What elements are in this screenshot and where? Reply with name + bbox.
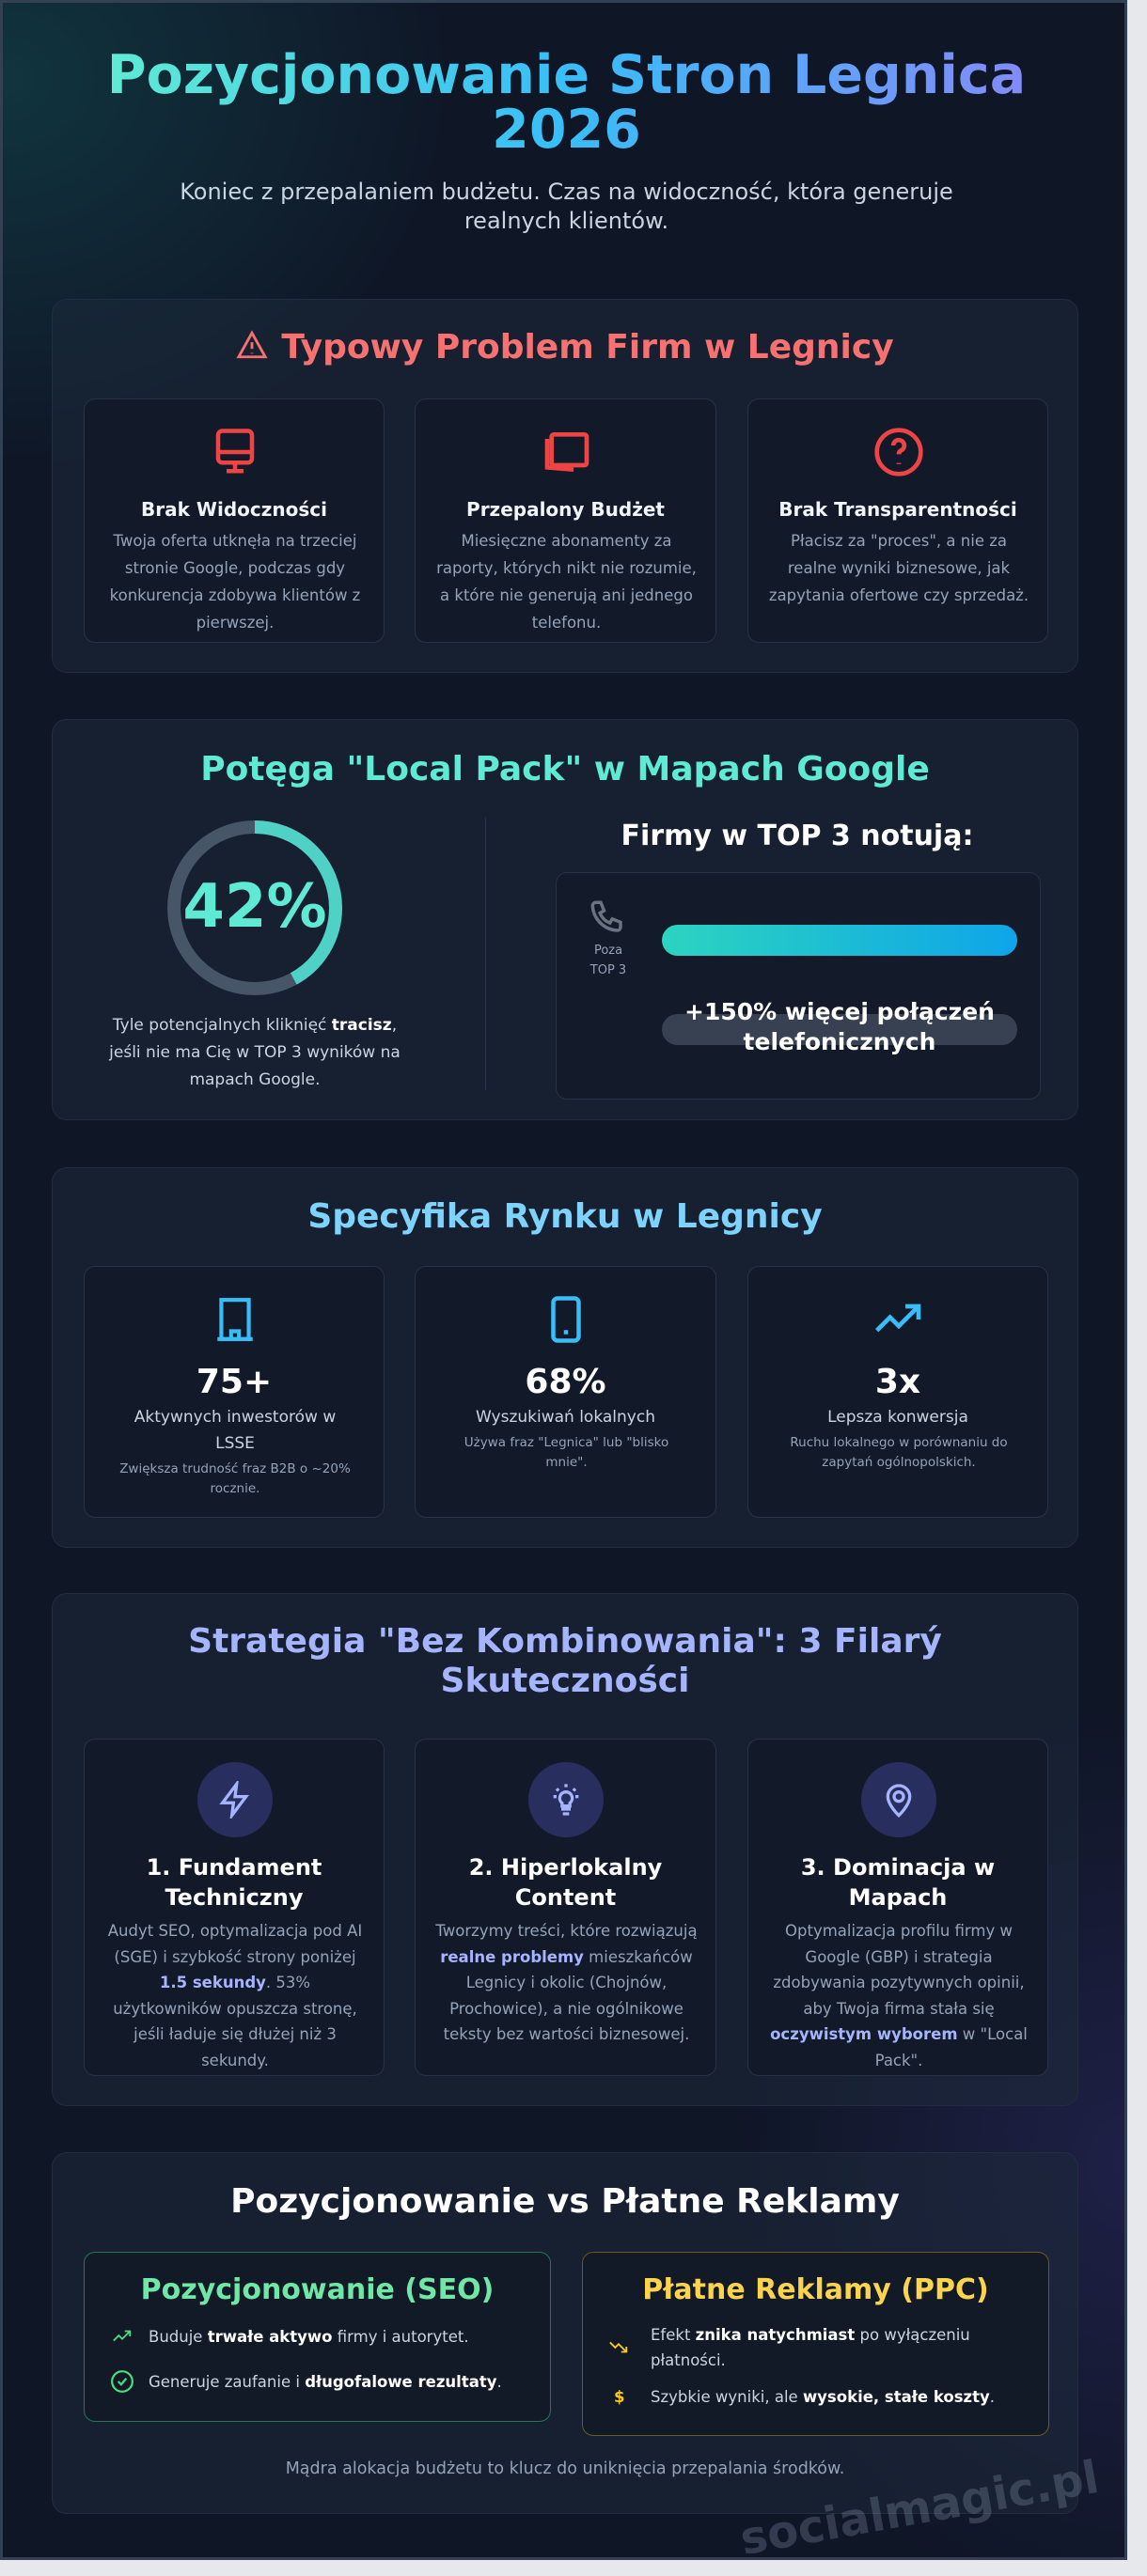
stat card: 75+: Aktywnych inwestorów w LSSE (134, 1408, 336, 1453)
subtitle: Koniec z przepalaniem budżetu. Czas na widoczność, która generuje (180, 179, 953, 205)
stat card: 68%: Używa fraz "Legnica" lub "blisko mnie". (464, 1435, 668, 1470)
card: brak widocznosci: Brak Widoczności (141, 498, 327, 521)
card: przepalony budzet (415, 398, 716, 643)
bar chart: calls: Poza (594, 944, 622, 958)
stat card: 3x (747, 1266, 1048, 1518)
footer note: Mądra alokacja budżetu to klucz do uniknięcia przepalania środków. (286, 2459, 844, 2478)
pillar 3: Optymalizacja profilu firmy w Google (GBP) i strategia zdobywania pozytywnych opinii, aby Twoja firma stała się oczywistym wyborem w "Local Pack". (770, 1922, 1028, 2069)
icon: phone (551, 1296, 581, 1343)
item: koszty: Szybkie wyniki, ale wysokie, stałe koszty. (651, 2388, 995, 2406)
icon: question (874, 428, 923, 476)
box: ppc (582, 2252, 1049, 2436)
heading: problems: Typowy Problem Firm w Legnicy (281, 328, 894, 367)
stat card: 68%: 68% (525, 1363, 606, 1401)
pillar 3 (747, 1739, 1048, 2076)
box: seo: Pozycjonowanie (SEO) (141, 2273, 494, 2306)
stat card: 3x: Lepsza konwersja (827, 1408, 968, 1427)
icon: phone (590, 900, 622, 932)
pillar 1: Audyt SEO, optymalizacja pod AI (SGE) i szybkość strony poniżej 1.5 sekundy. 53% użytkowników opuszcza stronę, jeśli ładuje się dłużej niż 3 sekundy. (108, 1922, 362, 2069)
bar chart: calls: +150% więcej połączeń telefonicznych (684, 998, 995, 1055)
box: seo (84, 2252, 551, 2422)
panel: seo vs ppc (52, 2152, 1078, 2514)
card: brak widocznosci: Twoja oferta utknęła na trzeciej stronie Google, podczas gdy konkurencja zdobywa klientów z pierwszej. (110, 532, 360, 632)
heading: comparison: Pozycjonowanie vs Płatne Reklamy (230, 2182, 900, 2221)
heading: local pack: Potęga "Local Pack" w Mapach Google (200, 750, 930, 788)
bar chart: calls (556, 872, 1041, 1100)
subtitle: realnych klientów. (464, 208, 668, 234)
pillar 1 (84, 1739, 385, 2076)
title (3, 48, 1130, 157)
caption: donut: Tyle potencjalnych kliknięć tracisz, jeśli nie ma Cię w TOP 3 wyników na mapach Google. (109, 1016, 401, 1089)
heading: firmy w top 3: Firmy w TOP 3 notują: (621, 820, 973, 852)
stat card: 75+: 75+ (196, 1363, 272, 1401)
card: brak transparentnosci: realne wyniki biznesowe, jak zapytania ofertowe czy sprzedaż. (769, 559, 1029, 604)
box: ppc: Płatne Reklamy (PPC) (642, 2273, 989, 2306)
item: znika: Efekt znika natychmiast po wyłączeniu płatności. (651, 2326, 970, 2369)
donut chart 42%: 42% (182, 872, 327, 942)
pillar 2 (415, 1739, 716, 2076)
panel: local pack (52, 719, 1078, 1120)
stat card: 75+: Zwiększa trudność fraz B2B o ~20% rocznie. (119, 1461, 351, 1496)
card: brak widocznosci (84, 398, 385, 643)
card: brak transparentnosci (747, 398, 1048, 643)
heading: strategy: Strategia "Bez Kombinowania": 3 Filarý (188, 1622, 942, 1661)
pillar 1: 1. Fundament (147, 1854, 322, 1881)
pillar 3: 3. Dominacja w (801, 1854, 995, 1881)
icon: money (545, 432, 589, 472)
icon: bolt (197, 1762, 273, 1837)
stat card: 3x: Ruchu lokalnego w porównaniu do zapytań ogólnopolskich. (790, 1435, 1008, 1470)
card: przepalony budzet: Przepalony Budżet (466, 498, 665, 521)
card: przepalony budzet: Miesięczne abonamenty za raporty, których nikt nie rozumie, a które nie generują ani jednego telefonu. (436, 532, 697, 632)
icon: building (217, 1298, 253, 1341)
pillar 3: Mapach (849, 1884, 947, 1911)
stat card: 75+ (84, 1266, 385, 1518)
card: brak transparentnosci: Płacisz za "proces", a nie za (791, 532, 1007, 550)
heading: strategy (188, 1622, 942, 1700)
card: brak transparentnosci: Brak Transparentności (778, 498, 1017, 521)
heading: market: Specyfika Rynku w Legnicy (307, 1197, 823, 1236)
stat card: 3x: 3x (875, 1363, 920, 1401)
item: zaufanie: Generuje zaufanie i długofalowe rezultaty. (149, 2373, 502, 2391)
pillar 1: Techniczny (165, 1884, 303, 1911)
subtitle (180, 179, 953, 234)
item: koszty: $ (614, 2388, 624, 2406)
pillar 2: 2. Hiperlokalny (469, 1854, 662, 1881)
pillar 2: Tworzymy treści, które rozwiązują realne problemy mieszkańców Legnicy i okolic (Chojnów, Prochowice), a nie ogólnikowe teksty bez wartości biznesowej. (435, 1922, 698, 2043)
icon: map pin (861, 1762, 936, 1837)
panel: problems (52, 299, 1078, 673)
icon: trending up (875, 1304, 921, 1333)
icon: bulb (528, 1762, 604, 1837)
pillar 2: Content (515, 1884, 616, 1911)
stat card: 68%: Wyszukiwań lokalnych (476, 1408, 655, 1427)
title: Pozycjonowanie Stron Legnica (107, 44, 1026, 106)
heading: strategy: Skuteczności (441, 1662, 689, 1700)
donut chart 42% (167, 820, 342, 995)
panel: market specifics (52, 1167, 1078, 1548)
item: trwale aktywo: Buduje trwałe aktywo firmy i autorytet. (149, 2328, 469, 2346)
icon: monitor (216, 429, 254, 474)
stat card: 68% (415, 1266, 716, 1518)
bar chart: calls: TOP 3 (590, 963, 626, 977)
title: 2026 (492, 99, 641, 161)
panel: strategy (52, 1593, 1078, 2106)
